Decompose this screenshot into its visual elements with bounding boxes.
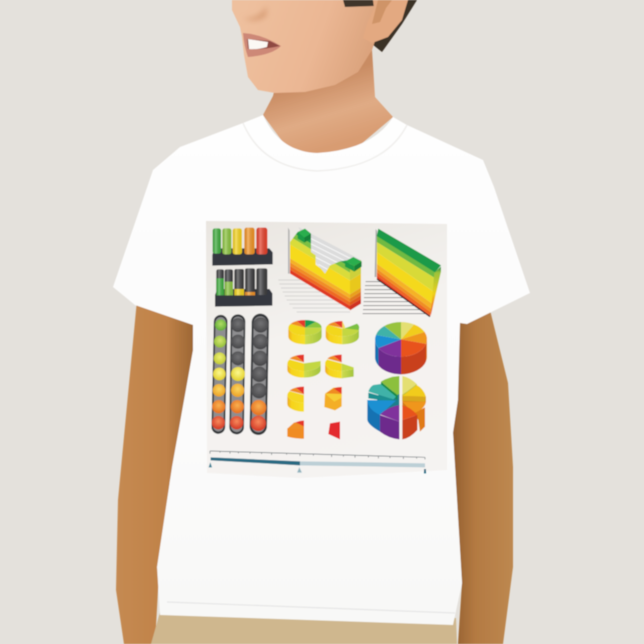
progress bar remainder bbox=[300, 461, 425, 467]
small pie: orange slice bbox=[287, 421, 304, 439]
balls bbox=[212, 319, 226, 429]
timeline ruler bbox=[209, 451, 426, 473]
balls bbox=[230, 318, 245, 429]
base shadow line bbox=[377, 279, 430, 317]
solid layered block chart bbox=[362, 228, 442, 318]
back wall bbox=[298, 227, 362, 275]
orange slice bbox=[402, 405, 417, 439]
blue slice bbox=[367, 400, 396, 432]
start marker bbox=[209, 462, 212, 467]
left arm bbox=[116, 300, 200, 644]
khaki shorts bbox=[151, 612, 457, 644]
green top block right bbox=[345, 257, 362, 272]
ear bbox=[363, 0, 408, 43]
mouth interior bbox=[247, 39, 280, 49]
face bbox=[232, 0, 380, 93]
capsule body bbox=[218, 322, 221, 427]
cylinder: lime fill bbox=[225, 269, 233, 295]
left axis bbox=[288, 228, 290, 274]
ruler ticks bbox=[210, 451, 425, 459]
hair side bbox=[343, 0, 376, 7]
cylinder: yellow fill bbox=[234, 269, 244, 295]
large 3D pie chart bbox=[375, 322, 427, 374]
nose shadow bbox=[243, 5, 267, 21]
balls bbox=[251, 317, 268, 431]
cylinder: orange fill bbox=[245, 268, 255, 295]
cylinder: green bbox=[213, 228, 221, 254]
floor lines bbox=[363, 282, 425, 314]
top face bbox=[377, 229, 441, 272]
khaki slice bbox=[402, 376, 417, 400]
cylinder: green fill bbox=[216, 269, 224, 295]
partially filled cylinders tray bbox=[215, 268, 272, 307]
end marker bbox=[424, 469, 426, 473]
tray shelf bbox=[212, 248, 273, 266]
right arm bbox=[450, 310, 513, 644]
small pie: red slice bbox=[328, 422, 340, 439]
collar seam bbox=[243, 123, 407, 171]
slices bbox=[375, 322, 427, 357]
green top block left bbox=[298, 229, 311, 243]
exploded 3D pie chart bbox=[367, 376, 426, 439]
ruler line bbox=[210, 451, 425, 457]
mouth lips bbox=[243, 33, 281, 57]
print artwork in scaled coordinates bbox=[209, 218, 443, 473]
front face stripes bbox=[289, 232, 351, 310]
traffic-light capsule: column 2 bbox=[230, 318, 245, 429]
right side face bbox=[350, 260, 361, 310]
amber slice bbox=[402, 402, 426, 432]
filled cylinders tray bbox=[212, 228, 273, 266]
t-shirt body and sleeves bbox=[113, 115, 530, 625]
mid marker bbox=[297, 467, 302, 473]
capsule inner bbox=[258, 323, 260, 426]
right hub shading bbox=[402, 387, 426, 415]
tray shelf bbox=[215, 289, 272, 307]
cylinder: empty bbox=[256, 268, 267, 295]
yellow slice bbox=[402, 385, 426, 402]
traffic-light capsule: column 3 bbox=[251, 317, 268, 431]
teeth bbox=[248, 39, 268, 49]
hair behind ear bbox=[372, 0, 417, 52]
capsule inner bbox=[218, 322, 221, 426]
capsule body bbox=[258, 322, 260, 426]
hem seam bbox=[167, 602, 455, 613]
teal slice bbox=[368, 384, 396, 402]
small pie: half bbox=[287, 387, 304, 412]
sides bbox=[375, 339, 427, 374]
small pie: two slices removed bbox=[287, 355, 321, 378]
front face stripes bbox=[376, 236, 436, 316]
left axis bbox=[375, 229, 377, 277]
green slice bbox=[381, 376, 399, 400]
cylinder: yellow bbox=[233, 228, 242, 254]
capsule body bbox=[237, 322, 238, 427]
cylinder: lime bbox=[222, 228, 231, 254]
model: boy wearing t-shirt bbox=[113, 0, 530, 644]
cylinder: orange bbox=[244, 228, 255, 254]
neck bbox=[263, 50, 393, 156]
capsule inner bbox=[237, 322, 238, 426]
small pie: three slices removed bbox=[325, 355, 354, 378]
cylinder: red bbox=[256, 228, 267, 254]
inner ear bbox=[372, 0, 392, 24]
progress bar filled bbox=[211, 457, 300, 465]
stair area chart bbox=[278, 228, 362, 313]
small pie: one slice removed bbox=[326, 321, 359, 344]
right side face bbox=[431, 267, 441, 316]
small pie: whole bbox=[288, 320, 322, 344]
floor lines bbox=[278, 280, 350, 312]
purple slice bbox=[380, 405, 399, 439]
small pie: quarter bbox=[324, 387, 342, 410]
panel background bbox=[206, 221, 447, 478]
traffic-light capsule: column 1 bbox=[212, 319, 226, 429]
printed infographic panel bbox=[206, 218, 447, 478]
left hub shading bbox=[377, 387, 399, 412]
